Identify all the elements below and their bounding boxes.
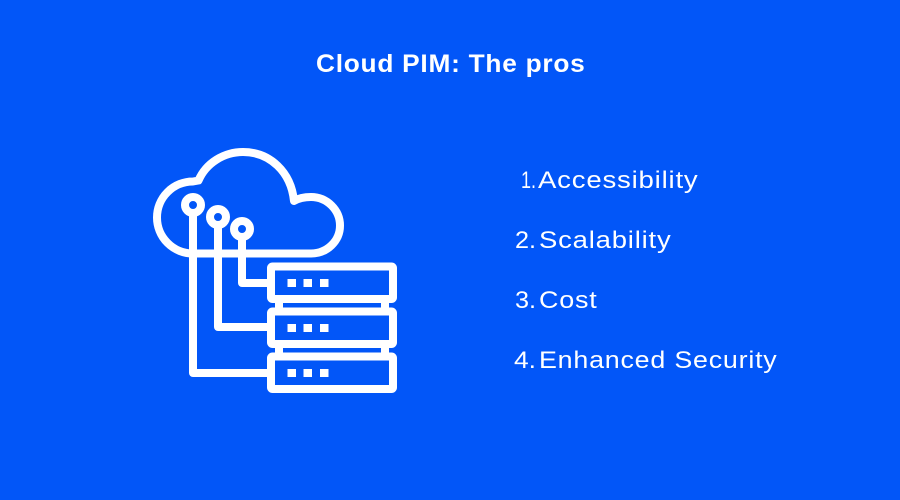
- icon part: server stack: [271, 266, 393, 389]
- icon part: cloud outline: [157, 152, 340, 254]
- icon part: connector node 2: [210, 209, 270, 327]
- list item 4: 4.: [514, 347, 536, 374]
- list item 1: Accessibility: [538, 167, 698, 194]
- server unit 3: [271, 356, 393, 389]
- title: Cloud PIM: The pros: [316, 50, 586, 78]
- list item 3: 3.: [515, 287, 536, 314]
- numbered list of pros: [514, 167, 778, 374]
- server unit 1: [271, 266, 393, 299]
- list item 4: Enhanced Security: [539, 347, 778, 374]
- icon: cloud connected to servers: [157, 152, 393, 389]
- list item 2: Scalability: [539, 227, 672, 254]
- list item 3: Cost: [539, 287, 598, 314]
- icon part: connector node 1: [185, 197, 270, 373]
- list item 2: 2.: [515, 227, 536, 254]
- server unit 2: [271, 312, 393, 344]
- list item 1: 1.: [521, 167, 536, 194]
- server rack joints: [275, 302, 389, 353]
- list item 3: [515, 287, 598, 314]
- icon part: connector node 3: [234, 221, 270, 283]
